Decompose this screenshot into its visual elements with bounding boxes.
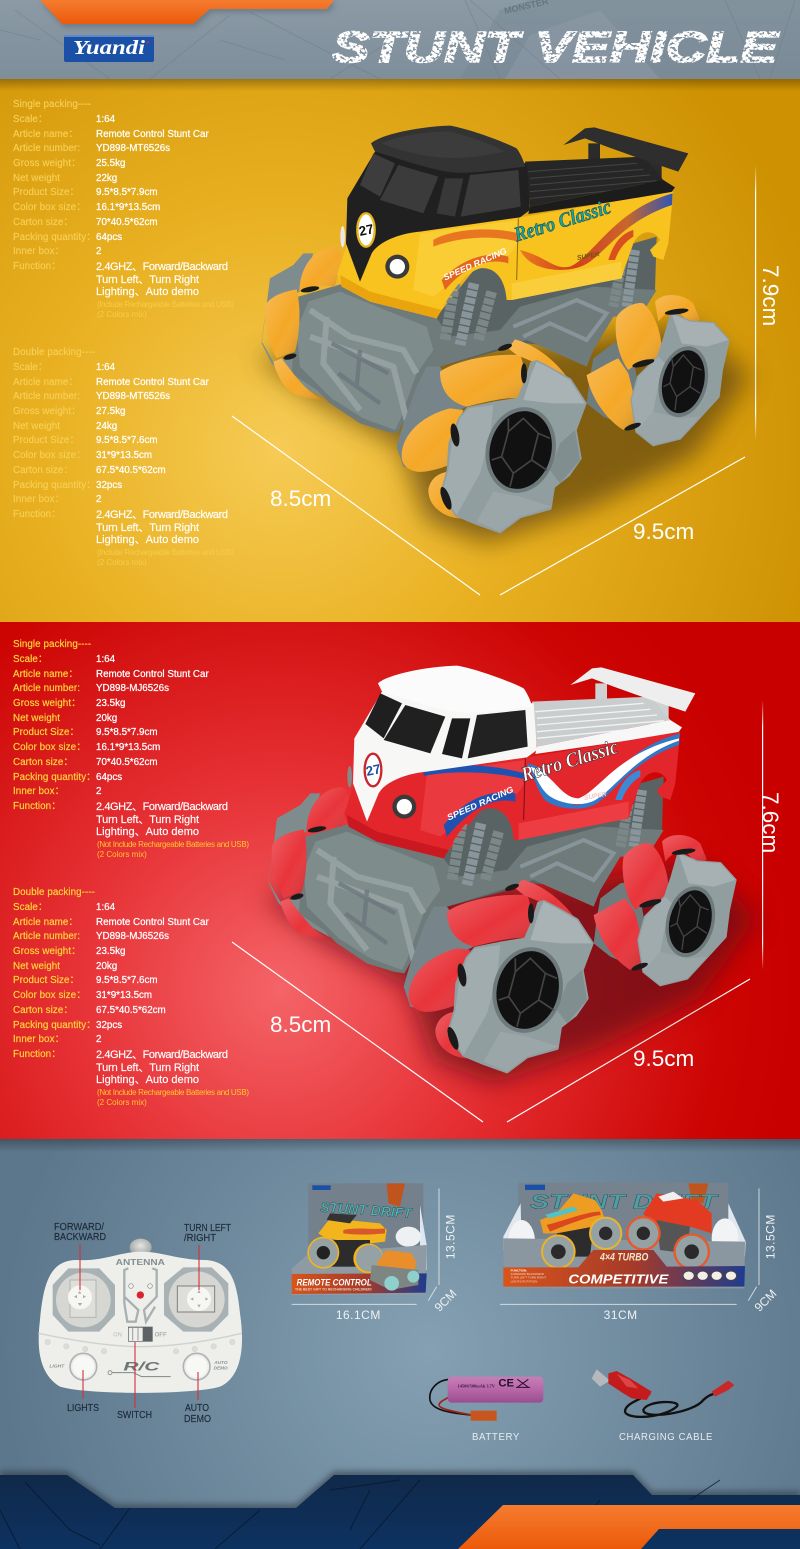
- dimension lines: red car: 8.5cm: [270, 1012, 331, 1037]
- color box: double: TURN LEFT TURN RIGHT: [511, 1276, 546, 1280]
- red car livery text: SUPER: [583, 791, 607, 802]
- spec block: red double packing: (Not Include Rechargeable Batteries and USB): [97, 1088, 249, 1097]
- spec block: yellow single packing: Scale：: [13, 114, 48, 125]
- spec block: yellow double packing: 2.4GHZ、Forward/Backward: [96, 509, 228, 521]
- caption: charging cable: CHARGING CABLE: [619, 1431, 713, 1443]
- remote control: OFF: [155, 1333, 167, 1339]
- remote callout labels: FORWARD/: [54, 1221, 104, 1233]
- yellow car bed and spoiler: [525, 127, 688, 214]
- logo: Yuandi: [64, 35, 154, 62]
- yellow car livery text: [442, 196, 614, 282]
- spec block: yellow double packing: (2 Colors mix): [97, 558, 147, 567]
- spec block: yellow double packing: [13, 347, 234, 567]
- box dimension labels: 9CM: [752, 1287, 779, 1314]
- red car livery text: [445, 736, 621, 822]
- spec block: red single packing: Product Size：: [13, 727, 79, 738]
- spec block: yellow double packing: 9.5*8.5*7.6cm: [96, 435, 158, 446]
- spec block: yellow single packing: 25.5kg: [96, 158, 125, 169]
- spec block: yellow single packing: Color box size：: [13, 202, 86, 213]
- spec block: yellow single packing: Carton size：: [13, 217, 73, 228]
- spec block: red single packing: Lighting、Auto demo: [96, 826, 199, 838]
- spec block: red double packing: 20kg: [96, 961, 117, 972]
- dimension lines: yellow car: [232, 165, 783, 595]
- color box: double: 4×4 TURBO: [599, 1252, 649, 1264]
- spec block: red single packing: 2.4GHZ、Forward/Backward: [96, 801, 228, 813]
- spec block: red double packing: Gross weight：: [13, 946, 81, 957]
- spec block: yellow single packing: Article number:: [13, 143, 80, 154]
- color box: double: [503, 1183, 746, 1288]
- spec block: red single packing: Turn Left、Turn Right: [96, 814, 199, 826]
- spec block: yellow double packing: 32pcs: [96, 480, 122, 491]
- yellow car badge: 27: [358, 221, 375, 239]
- spec block: yellow single packing: [13, 99, 234, 319]
- orange corner tab: top: [40, 0, 336, 27]
- spec block: yellow double packing: Remote Control Stunt Car: [96, 377, 209, 388]
- color box: single: THE BEST GIFT TO RECHARGING CHILDREN!: [295, 1287, 372, 1291]
- spec block: red single packing: Remote Control Stunt Car: [96, 669, 209, 680]
- yellow car badge: [357, 213, 375, 247]
- spec block: red double packing: Net weight: [13, 961, 60, 972]
- dimension lines: yellow car: 8.5cm: [270, 486, 331, 511]
- yellow car livery text: SUPER: [576, 251, 600, 262]
- color box: double: FUNCTION:: [511, 1268, 527, 1272]
- spec block: yellow single packing: Inner box：: [13, 246, 64, 257]
- spec block: yellow single packing: 1:64: [96, 114, 116, 125]
- spec block: yellow double packing: Lighting、Auto demo: [96, 534, 199, 546]
- spec block: yellow single packing: Function：: [13, 261, 61, 272]
- box dimension labels: 31CM: [604, 1308, 638, 1322]
- spec block: yellow double packing: (Include Rechargeable Batteries and USB): [97, 548, 234, 557]
- logo: Yuandi: Yuandi: [73, 37, 146, 59]
- spec block: yellow double packing: Carton size：: [13, 465, 73, 476]
- color box: single: STUNT DRIFT: [320, 1199, 414, 1221]
- spec block: red double packing: [13, 887, 249, 1107]
- remote callout labels: [54, 1221, 231, 1425]
- footer band: [0, 1471, 800, 1549]
- spec block: red double packing: Lighting、Auto demo: [96, 1074, 199, 1086]
- orange corner tab: bottom: [458, 1505, 800, 1549]
- red car body: [344, 732, 680, 858]
- red car bed and spoiler: [532, 667, 695, 754]
- spec block: red single packing: 70*40.5*62cm: [96, 757, 158, 768]
- car: yellow stunt vehicle: [257, 126, 750, 543]
- red car livery text: SPEED RACING: [445, 784, 515, 822]
- spec block: red single packing: 23.5kg: [96, 698, 125, 709]
- spec block: red double packing: YD898-MJ6526s: [96, 931, 169, 942]
- spec block: red double packing: 9.5*8.5*7.6cm: [96, 975, 158, 986]
- spec block: yellow double packing: 67.5*40.5*62cm: [96, 465, 166, 476]
- spec block: red single packing: Function：: [13, 801, 61, 812]
- spec block: red double packing: Function：: [13, 1049, 61, 1060]
- box dimension labels: [336, 1214, 779, 1322]
- spec block: yellow single packing: 22kg: [96, 173, 117, 184]
- spec block: red double packing: 2.4GHZ、Forward/Backward: [96, 1049, 228, 1061]
- panel: accessories section: [0, 1139, 800, 1549]
- spec block: yellow double packing: 1:64: [96, 362, 116, 373]
- spec block: yellow single packing: Article name：: [13, 129, 78, 140]
- spec block: yellow single packing: Gross weight：: [13, 158, 81, 169]
- remote callout labels: TURN LEFT: [184, 1222, 231, 1234]
- red car badge: [364, 753, 382, 787]
- spec block: red single packing: Single packing----: [13, 639, 91, 650]
- remote control: ON: [113, 1333, 122, 1339]
- remote callout labels: SWITCH: [117, 1409, 152, 1421]
- spec block: yellow single packing: 70*40.5*62cm: [96, 217, 158, 228]
- spec block: yellow double packing: 27.5kg: [96, 406, 125, 417]
- spec block: red single packing: 20kg: [96, 713, 117, 724]
- dimension lines: yellow car: 9.5cm: [633, 519, 694, 544]
- remote control: R/C: [123, 1360, 160, 1374]
- box dimension labels: 13.5CM: [763, 1214, 777, 1259]
- remote callout labels: /RIGHT: [184, 1232, 217, 1244]
- yellow car livery text: Retro Classic: [511, 196, 614, 247]
- spec block: yellow double packing: Article name：: [13, 377, 78, 388]
- spec block: red double packing: 23.5kg: [96, 946, 125, 957]
- box dimension labels: 9CM: [432, 1287, 459, 1314]
- spec block: red single packing: Gross weight：: [13, 698, 81, 709]
- color box: single: REMOTE CONTROL: [297, 1277, 372, 1287]
- color box: double: COMPETITIVE: [568, 1272, 669, 1286]
- spec block: yellow single packing: Net weight: [13, 173, 60, 184]
- spec block: red double packing: Article name：: [13, 917, 78, 928]
- car: red stunt vehicle: [264, 666, 757, 1083]
- red car livery text: Retro Classic: [518, 736, 621, 787]
- spec block: red double packing: Scale：: [13, 902, 48, 913]
- spec block: red single packing: 2: [96, 786, 101, 797]
- spec block: red double packing: 2: [96, 1034, 101, 1045]
- panel: yellow car section: [0, 79, 800, 622]
- spec block: red single packing: 64pcs: [96, 772, 122, 783]
- remote callout labels: BACKWARD: [54, 1231, 106, 1243]
- spec block: yellow single packing: 64pcs: [96, 232, 122, 243]
- remote control: LIGHT: [49, 1364, 65, 1370]
- battery: 14500/500mAh 3.7V: [458, 1384, 496, 1389]
- remote callout labels: DEMO: [184, 1413, 211, 1425]
- yellow car livery text: SPEED RACING: [442, 245, 508, 282]
- spec block: yellow double packing: 31*9*13.5cm: [96, 450, 152, 461]
- box dimension labels: 16.1CM: [336, 1308, 381, 1322]
- spec block: yellow single packing: 9.5*8.5*7.9cm: [96, 187, 158, 198]
- spec block: red single packing: (2 Colors mix): [97, 850, 147, 859]
- spec block: yellow double packing: Scale：: [13, 362, 48, 373]
- spec block: yellow double packing: Packing quantity：: [13, 480, 96, 491]
- spec block: yellow single packing: 2: [96, 246, 101, 257]
- remote control: DEMO: [214, 1366, 228, 1371]
- spec block: red double packing: (2 Colors mix): [97, 1098, 147, 1107]
- title: STUNT VEHICLE: STUNT VEHICLE: [332, 23, 780, 72]
- spec block: red single packing: Scale：: [13, 654, 48, 665]
- red car cabin: [353, 666, 537, 822]
- spec block: red single packing: Article number:: [13, 683, 80, 694]
- color box: double: STUNT DRIFT: [530, 1190, 720, 1213]
- battery: [430, 1377, 543, 1421]
- dimension lines: red car: [232, 700, 783, 1122]
- dimension lines: red car: 7.6cm: [758, 792, 783, 853]
- spec block: red single packing: YD898-MJ6526s: [96, 683, 169, 694]
- box dimension labels: 13.5CM: [443, 1214, 457, 1259]
- spec block: red single packing: Net weight: [13, 713, 60, 724]
- spec block: yellow double packing: Color box size：: [13, 450, 86, 461]
- remote control: AUTO: [213, 1360, 228, 1365]
- spec block: yellow double packing: Net weight: [13, 421, 60, 432]
- spec block: yellow double packing: Article number:: [13, 391, 80, 402]
- spec block: yellow single packing: Packing quantity：: [13, 232, 96, 243]
- box dimension lines: [292, 1188, 759, 1304]
- spec block: red single packing: Color box size：: [13, 742, 86, 753]
- spec block: red double packing: Carton size：: [13, 1005, 73, 1016]
- spec block: yellow single packing: (Include Rechargeable Batteries and USB): [97, 300, 234, 309]
- spec block: yellow single packing: YD898-MT6526s: [96, 143, 170, 154]
- color box: double: FORWARD BACKWARD: [511, 1272, 545, 1276]
- color box: double: LIGHTS ROTATION: [511, 1279, 537, 1283]
- spec block: red double packing: Remote Control Stunt Car: [96, 917, 209, 928]
- spec block: red double packing: Color box size：: [13, 990, 86, 1001]
- spec block: red single packing: 1:64: [96, 654, 116, 665]
- spec block: yellow single packing: Turn Left、Turn Right: [96, 274, 199, 286]
- spec block: red double packing: 31*9*13.5cm: [96, 990, 152, 1001]
- spec block: red single packing: 16.1*9*13.5cm: [96, 742, 160, 753]
- battery: CE: [498, 1378, 515, 1390]
- red car badge: 27: [365, 761, 382, 779]
- spec block: red double packing: 67.5*40.5*62cm: [96, 1005, 166, 1016]
- yellow car headlight: [340, 226, 409, 279]
- spec block: yellow single packing: 16.1*9*13.5cm: [96, 202, 160, 213]
- charging cable: [592, 1369, 734, 1417]
- spec block: red double packing: Article number:: [13, 931, 80, 942]
- spec block: red single packing: Article name：: [13, 669, 78, 680]
- spec block: yellow double packing: Turn Left、Turn Right: [96, 522, 199, 534]
- spec block: red double packing: Inner box：: [13, 1034, 64, 1045]
- spec block: yellow double packing: Double packing----: [13, 347, 95, 358]
- remote control: ANTENNA: [116, 1258, 165, 1267]
- spec block: yellow double packing: 24kg: [96, 421, 117, 432]
- spec block: yellow double packing: 2: [96, 494, 101, 505]
- spec block: yellow single packing: (2 Colors mix): [97, 310, 147, 319]
- spec block: yellow single packing: Lighting、Auto demo: [96, 286, 199, 298]
- spec block: red single packing: 9.5*8.5*7.9cm: [96, 727, 158, 738]
- dimension lines: red car: 9.5cm: [633, 1046, 694, 1071]
- red car wheels: [290, 825, 735, 1072]
- spec block: yellow single packing: 2.4GHZ、Forward/Backward: [96, 261, 228, 273]
- spec block: red double packing: 1:64: [96, 902, 116, 913]
- red car headlight: [347, 766, 416, 819]
- dimension lines: yellow car: 7.9cm: [758, 265, 783, 326]
- yellow car wheels: [283, 285, 728, 532]
- header band: [0, 0, 800, 79]
- remote control: [38, 1239, 242, 1393]
- spec block: red double packing: Double packing----: [13, 887, 95, 898]
- spec block: yellow single packing: Remote Control Stunt Car: [96, 129, 209, 140]
- spec block: red single packing: Packing quantity：: [13, 772, 96, 783]
- spec block: yellow double packing: Function：: [13, 509, 61, 520]
- spec block: red double packing: 32pcs: [96, 1020, 122, 1031]
- color box: single: [292, 1183, 427, 1295]
- spec block: red single packing: [13, 639, 249, 859]
- yellow car body: [337, 192, 673, 318]
- spec block: yellow double packing: Product Size：: [13, 435, 79, 446]
- remote callout labels: AUTO: [185, 1402, 209, 1414]
- panel: red car section: [0, 622, 800, 1139]
- spec block: yellow double packing: Inner box：: [13, 494, 64, 505]
- yellow car cabin: [346, 126, 530, 282]
- spec block: yellow single packing: Product Size：: [13, 187, 79, 198]
- spec block: yellow double packing: YD898-MT6526s: [96, 391, 170, 402]
- spec block: yellow double packing: Gross weight：: [13, 406, 81, 417]
- spec block: red double packing: Turn Left、Turn Right: [96, 1062, 199, 1074]
- remote callout labels: LIGHTS: [67, 1402, 99, 1414]
- spec block: red double packing: Product Size：: [13, 975, 79, 986]
- spec block: red double packing: Packing quantity：: [13, 1020, 96, 1031]
- spec block: yellow single packing: Single packing----: [13, 99, 91, 110]
- spec block: red single packing: (Not Include Rechargeable Batteries and USB): [97, 840, 249, 849]
- spec block: red single packing: Inner box：: [13, 786, 64, 797]
- caption: battery: BATTERY: [472, 1431, 520, 1443]
- spec block: red single packing: Carton size：: [13, 757, 73, 768]
- remote callout lines: [80, 1244, 199, 1408]
